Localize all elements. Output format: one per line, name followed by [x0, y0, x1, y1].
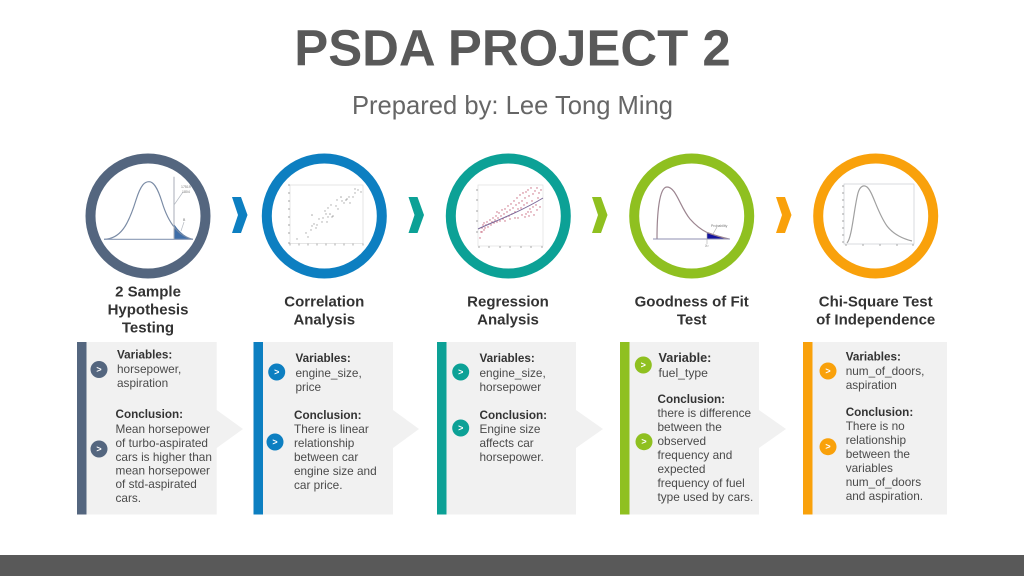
bullet: variable: > — [641, 360, 646, 370]
bullet: variables — [268, 364, 285, 380]
text: variables: Variables: — [480, 352, 535, 365]
icon: ring with normal distribution chart: 1804 — [182, 190, 190, 194]
icon: ring with normal distribution chart — [90, 158, 206, 274]
text: conclusion: between the — [658, 420, 722, 434]
text: variables: aspiration — [117, 376, 168, 390]
text: variables: engine_size, — [480, 366, 546, 380]
icon: ring with chi-square tail chart: X² — [705, 244, 709, 248]
text: conclusion: type used by cars. — [658, 490, 753, 504]
text: conclusion: frequency of fuel — [658, 476, 745, 490]
text: conclusion: cars. — [116, 491, 141, 505]
text: conclusion: There is linear — [294, 422, 369, 436]
text: conclusion: Conclusion: — [658, 393, 725, 406]
text: conclusion: Conclusion: — [846, 406, 913, 419]
icon: ring with normal distribution chart: 17519 — [181, 185, 191, 189]
bullet: conclusion — [636, 433, 652, 450]
step 5: chi-square test of independence — [803, 158, 947, 514]
heading: Regression — [467, 294, 549, 310]
text: variables: aspiration — [846, 378, 897, 392]
text: conclusion: mean horsepower — [116, 464, 210, 478]
text: variables: horsepower — [480, 380, 541, 394]
text: conclusion: Conclusion: — [294, 409, 362, 422]
bullet: conclusion: > — [96, 444, 102, 454]
panel: step 5 details — [803, 342, 947, 514]
text: conclusion: variables — [846, 461, 893, 475]
step 3: regression analysis — [437, 158, 603, 514]
bullet: conclusion: > — [641, 437, 647, 447]
text: conclusion: of std-aspirated — [116, 477, 197, 491]
step 1: 2 sample hypothesis testing: Testing — [122, 320, 174, 336]
text: variables: engine_size, — [296, 366, 362, 380]
footer bar — [0, 555, 1024, 576]
step 1: 2 sample hypothesis testing — [77, 158, 243, 514]
text: conclusion: Conclusion: — [480, 409, 547, 422]
text: conclusion: frequency and — [658, 448, 732, 462]
heading: Goodness of Fit — [635, 294, 749, 310]
bullet: conclusion — [820, 438, 836, 455]
step 4: goodness of fit test: Test — [677, 312, 707, 328]
text: conclusion: num_of_doors — [846, 475, 921, 489]
icon: ring with scatter chart — [267, 158, 382, 274]
step 3: regression analysis: Analysis — [477, 312, 539, 328]
text: conclusion: between the — [846, 447, 910, 461]
text: conclusion: horsepower. — [480, 450, 544, 464]
arrow: step 4 to 5 — [776, 197, 792, 233]
subtitle: Prepared by: Lee Tong Ming — [352, 92, 673, 120]
text: conclusion: There is no — [846, 419, 905, 433]
text: conclusion: cars is higher than — [116, 450, 212, 464]
bullet: conclusion: > — [272, 437, 278, 447]
step 5: chi-square test of independence: of Independence — [816, 312, 935, 328]
bullet: variables: > — [825, 366, 831, 376]
bullet: variables: > — [96, 364, 102, 374]
icon: ring with normal distribution chart: B — [183, 218, 186, 222]
bullet: variables: > — [274, 367, 279, 377]
bullet: conclusion — [266, 434, 284, 450]
text: conclusion: engine size and — [294, 464, 377, 478]
text: conclusion: Engine size — [480, 422, 541, 436]
text: conclusion: expected — [658, 462, 705, 476]
icon: ring with chi-square tail chart — [634, 158, 749, 274]
text: conclusion: relationship — [294, 436, 355, 450]
arrow: step 1 to 2 — [232, 197, 248, 233]
text: conclusion: of turbo-aspirated — [116, 436, 208, 450]
bullet: conclusion — [452, 420, 469, 436]
step 2: correlation analysis: Analysis — [293, 312, 355, 328]
text: variables: price — [296, 380, 322, 394]
text: variables: num_of_doors, — [846, 364, 924, 378]
text: conclusion: affects car — [480, 436, 534, 450]
title: PSDA PROJECT 2 — [294, 20, 731, 76]
text: variable: Variable: — [658, 351, 711, 365]
text: conclusion: and aspiration. — [846, 489, 923, 503]
icon: ring with regression scatter chart — [451, 158, 566, 274]
text: conclusion: car price. — [294, 478, 343, 492]
bullet: conclusion: > — [825, 442, 831, 452]
step 1: 2 sample hypothesis testing: Hypothesis — [108, 302, 188, 318]
panel: step 2 details — [254, 342, 419, 514]
bullet: variables: > — [458, 367, 463, 377]
bullet: conclusion: > — [458, 423, 463, 433]
text: conclusion: Conclusion: — [116, 408, 183, 421]
text: variables: Variables: — [846, 350, 901, 364]
bullet: variables — [820, 362, 836, 380]
heading: Correlation — [284, 294, 364, 310]
text: conclusion: observed — [658, 434, 706, 448]
panel: step 4 details — [620, 342, 786, 514]
bullet: variables — [452, 364, 469, 380]
panel: step 3 details — [437, 342, 603, 514]
text: variable: fuel_type — [658, 366, 708, 380]
arrow: step 3 to 4 — [592, 197, 608, 233]
text: variables: horsepower, — [117, 362, 181, 376]
bullet: conclusion — [90, 440, 108, 458]
bullet: variable — [635, 356, 652, 374]
text: variables: Variables: — [296, 352, 351, 365]
text: conclusion: Mean horsepower — [116, 422, 210, 436]
step 4: goodness of fit test — [620, 158, 786, 514]
text: conclusion: between car — [294, 450, 358, 464]
text: conclusion: there is difference — [658, 406, 751, 420]
heading: 2 Sample — [115, 284, 181, 300]
text: variables: Variables: — [117, 348, 172, 362]
bullet: variables — [90, 361, 108, 378]
heading: Chi-Square Test — [819, 294, 933, 310]
text: conclusion: relationship — [846, 433, 906, 447]
step 2: correlation analysis — [254, 158, 419, 514]
arrow: step 2 to 3 — [408, 197, 424, 233]
panel: step 1 details — [77, 342, 243, 514]
icon: ring with chi-square tail chart: Probability — [711, 224, 728, 228]
icon: ring with density chart — [818, 158, 933, 274]
